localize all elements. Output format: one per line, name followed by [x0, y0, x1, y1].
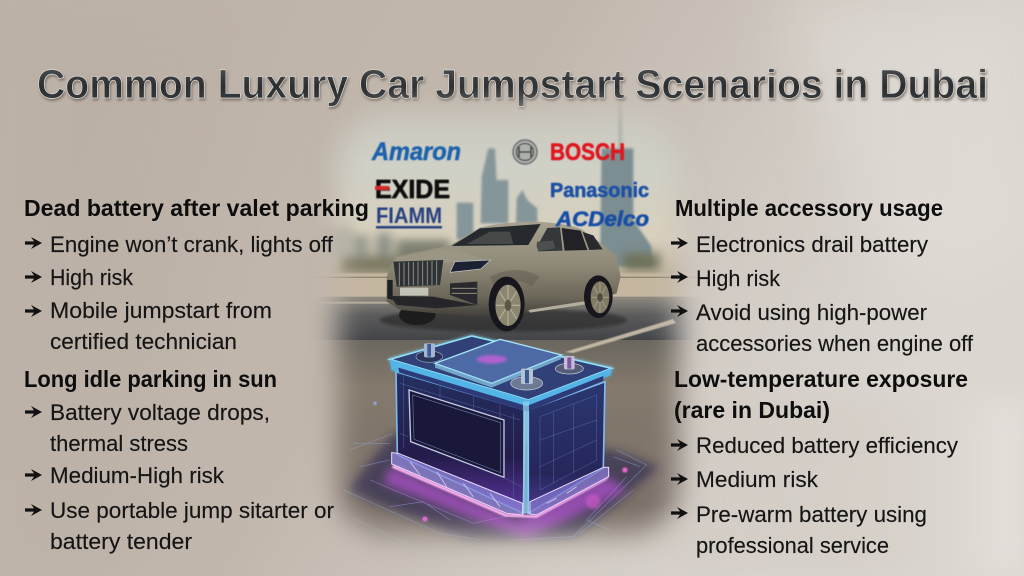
logo: Amaron: Amaron: [371, 138, 461, 166]
bullet: battery voltage drops: thermal stress: [50, 431, 188, 456]
car: [380, 222, 627, 332]
logo: EXIDE: EXIDE: [375, 174, 450, 204]
inner panel: [409, 390, 504, 477]
bullet: high risk: High risk: [50, 265, 134, 290]
terminals: [416, 351, 443, 362]
logo: Bosch emblem: [513, 140, 537, 164]
battery lid: [390, 336, 612, 407]
bullet: engine won't crank: Engine won’t crank, lights off: [50, 232, 334, 257]
logo: FIAMM: FIAMM: [376, 203, 442, 228]
city skyline: [332, 91, 689, 274]
title: Common Luxury Car Jumpstart Scenarios in Dubai: [37, 61, 988, 107]
central scene: city, car and battery: [317, 91, 699, 554]
panel: long idle parking in sun: [24, 366, 334, 554]
bullet: avoid high-power accessories: [671, 300, 974, 356]
bullet: avoid high-power accessories: accessories when engine off: [696, 331, 974, 356]
logo: ACDelco: ACDelco: [555, 208, 649, 231]
base: [392, 453, 523, 515]
bullet: portable jump starter: Use portable jump sitarter or: [50, 498, 334, 523]
logo: BOSCH: BOSCH: [550, 139, 625, 166]
road: [317, 272, 699, 340]
bullet: high risk: High risk: [696, 266, 781, 291]
bullet: battery voltage drops: Battery voltage drops,: [50, 400, 270, 425]
heading: Long idle parking in sun: [24, 366, 277, 392]
heading: Low-temperature exposure: [674, 366, 968, 392]
inner lid: [435, 339, 562, 383]
brand logos: [371, 138, 649, 231]
bullet: mobile jumpstart: Mobile jumpstart from: [50, 298, 272, 323]
ground under battery: [320, 340, 698, 554]
bullet: battery voltage drops: [25, 400, 270, 456]
heading: [674, 366, 968, 423]
right face: [528, 382, 605, 513]
bullet: medium-high risk: Medium-High risk: [50, 463, 225, 488]
panel: dead battery after valet parking: [24, 195, 369, 354]
bullet: pre-warm battery: [671, 502, 927, 558]
battery: [343, 336, 660, 550]
bullet: pre-warm battery: Pre-warm battery using: [696, 502, 927, 527]
bullet: portable jump starter: battery tender: [50, 529, 193, 554]
bullet: pre-warm battery: professional service: [696, 533, 889, 558]
road marking: [565, 319, 676, 353]
bullet: reduced efficiency: Reduced battery efficiency: [696, 433, 959, 458]
bullet: medium risk: Medium risk: [696, 467, 819, 492]
heading: Multiple accessory usage: [675, 195, 943, 221]
bullet: portable jump starter: [25, 498, 334, 554]
heading: Dead battery after valet parking: [24, 195, 369, 221]
heading: (rare in Dubai): [674, 397, 830, 423]
logo: Panasonic: Panasonic: [550, 180, 649, 202]
bullet: electronics drain: Electronics drail battery: [696, 232, 929, 257]
bullet: avoid high-power accessories: Avoid using high-power: [696, 300, 927, 325]
panel: multiple accessory usage: [671, 195, 974, 356]
bullet: mobile jumpstart: certified technician: [50, 329, 237, 354]
floor circuit grid: [343, 402, 660, 550]
bullet: mobile jumpstart: [25, 298, 272, 354]
panel: low-temperature exposure: [671, 366, 968, 558]
left face: [396, 372, 525, 513]
